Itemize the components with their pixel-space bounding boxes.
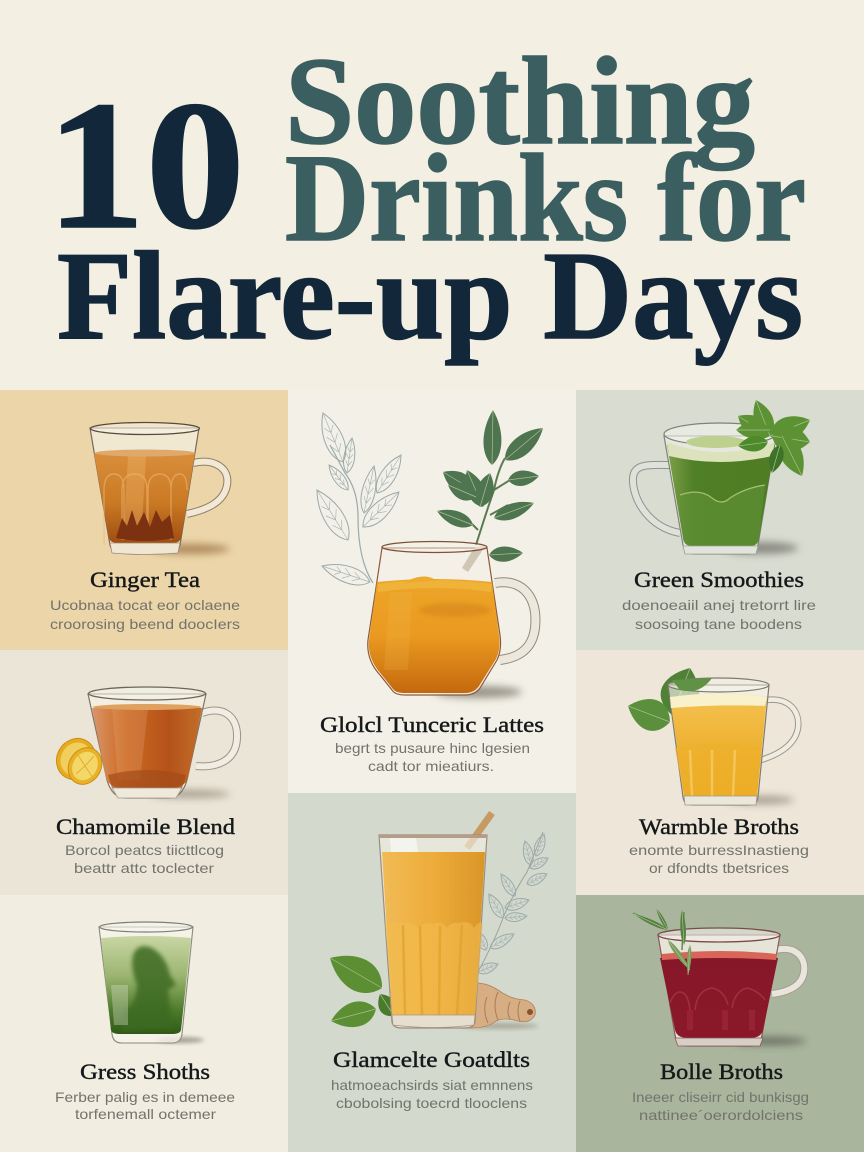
illustration: mint leaves (623, 661, 708, 737)
icon: warm broth mug (668, 678, 798, 805)
panel: Gress Shoths (0, 895, 288, 1152)
description: hatmoeachsirds siat emnnens (331, 1077, 533, 1093)
icon: lemon slices (49, 731, 108, 790)
number 10: 10 (46, 63, 245, 267)
description (632, 1089, 809, 1123)
panel: Glamcelte Goatdlts (288, 793, 576, 1152)
heading: Chamomile Blend (56, 814, 235, 839)
description: or dfondts tbetsrices (649, 860, 789, 876)
icon: green shot glass (99, 922, 204, 1043)
title line: Soothing: Soothing (285, 33, 755, 171)
heading: Gress Shoths (80, 1059, 210, 1084)
illustration: basil leaves (322, 944, 402, 1033)
description (335, 740, 530, 774)
heading: Ginger Tea (90, 567, 200, 592)
description: enomte burressInastieng (629, 842, 809, 858)
description: cbobolsing toecrd tlooclens (336, 1095, 527, 1111)
description: Borcol peatcs tiicttlcog (65, 842, 224, 858)
description (331, 1077, 533, 1111)
description: croorosing beend doocIers (50, 616, 240, 632)
description: beattr attc toclecter (74, 860, 214, 876)
panel: Golden Turmeric Lattes (288, 390, 576, 793)
description: nattinee´oerordolciens (639, 1107, 803, 1123)
icon: straw (467, 813, 492, 848)
panel: Bolle Broths (576, 895, 864, 1152)
description (65, 842, 224, 876)
panel: Green Smoothies (576, 390, 864, 650)
description (622, 597, 816, 632)
illustration: outline sprig (474, 832, 550, 976)
illustration: green sprig (434, 410, 549, 563)
description: begrt ts pusaure hinc lgesien (335, 740, 530, 756)
panel: Ginger Tea (0, 390, 288, 650)
icon: ginger tea glass (90, 422, 230, 554)
heading: Glamcelte Goatdlts (333, 1047, 530, 1072)
heading: Glolcl Tunceric Lattes (320, 712, 544, 737)
heading: Warmble Broths (639, 814, 799, 839)
panel: Warmble Broths (576, 650, 864, 895)
illustration: parsley sprig (733, 397, 814, 481)
panel: Chamomile Blend (0, 650, 288, 895)
description: cadt tor mieatiurs. (368, 758, 494, 774)
description (629, 842, 809, 876)
description: torfenemall octemer (75, 1106, 216, 1122)
description: Ferber palig es in demeee (55, 1089, 235, 1105)
icon: turmeric smoothie glass (379, 835, 487, 1028)
description (50, 597, 240, 632)
heading: Bolle Broths (660, 1059, 783, 1084)
icon: turmeric latte mug (368, 542, 535, 698)
heading: Green Smoothies (634, 567, 804, 592)
illustration: ginger root (462, 983, 538, 1029)
description: Ucobnaa tocat eor oclaene (50, 597, 240, 613)
description: Ineeer cliseirr cid bunkisgg (632, 1089, 809, 1105)
illustration: outline leaves (309, 410, 407, 590)
description (55, 1089, 235, 1122)
icon: berry broth mug (658, 928, 806, 1046)
icon: chamomile cup (88, 687, 237, 798)
description: soosoing tane boodens (635, 616, 802, 632)
panel: header (0, 0, 864, 390)
description: doenoeaiil anej tretorrt lire (622, 597, 816, 613)
title line: Drinks for: Drinks for (285, 130, 806, 268)
title line: Flare-up Days: Flare-up Days (57, 227, 803, 366)
illustration: rosemary sprig (633, 907, 692, 975)
icon: green smoothie mug (633, 423, 798, 554)
